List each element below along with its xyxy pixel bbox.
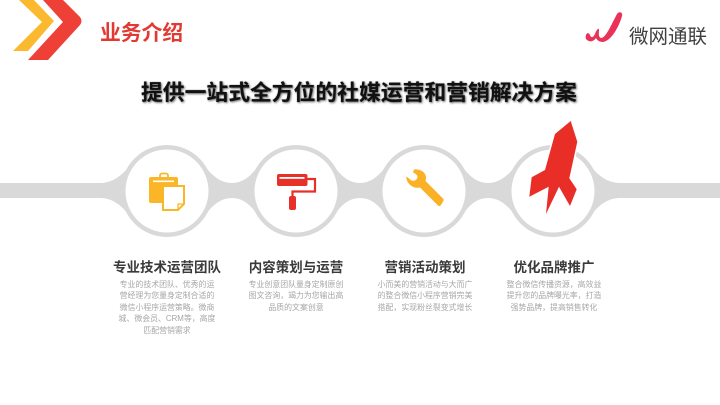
icon: paint roller [277, 174, 315, 210]
column: 内容策划与运营: 专业创意团队量身定制原创图文咨询，竭力为您输出高品质的文案创意 [249, 280, 343, 312]
icon: rocket [529, 121, 577, 214]
icon: header chevrons [13, 0, 82, 60]
column: 营销活动策划: 小而美的营销活动与大而广的整合微信小程序营销完美搭配，实现粉丝裂变式增长 [378, 280, 472, 312]
column: 内容策划与运营: 内容策划与运营 [249, 260, 343, 275]
column: 优化品牌推广 [506, 260, 602, 312]
logo wordmark: 微网通联 [629, 20, 707, 49]
column: 营销活动策划: 营销活动策划 [384, 260, 466, 275]
icon: company logo swoosh [586, 12, 622, 42]
heading: 业务介绍 [100, 22, 183, 45]
column: 优化品牌推广: 优化品牌推广 [514, 260, 594, 275]
icon: clipboard and note [149, 174, 184, 210]
icon: wrench [406, 169, 444, 206]
column: 专业技术运营团队: 专业技术运营团队 [113, 260, 221, 275]
column: 内容策划与运营 [249, 260, 343, 312]
column: 专业技术运营团队: 专业的技术团队、优秀的运营经理为您量身定制合适的微信小程序运营策略。微商城、微会员、CRM等，高度匹配营销需求 [119, 280, 215, 335]
main title: 提供一站式全方位的社媒运营和营销解决方案 [141, 80, 577, 105]
column: 专业技术运营团队 [113, 260, 221, 335]
column: 优化品牌推广: 整合微信传播资源，高效益提升您的品牌曝光率，打造强势品牌，提高销售转化 [507, 280, 601, 312]
column: 营销活动策划 [378, 260, 472, 312]
connector band with circles [0, 145, 720, 237]
